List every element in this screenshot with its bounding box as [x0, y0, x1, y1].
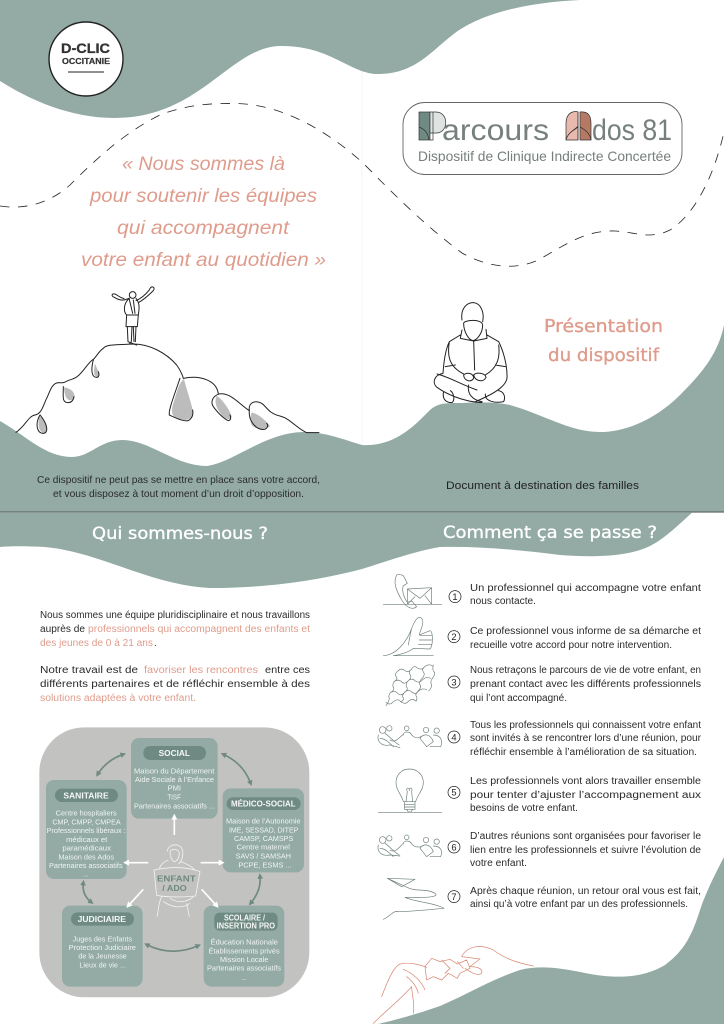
child figure with sign [154, 845, 200, 917]
intro paragraph: . [154, 638, 157, 649]
child figure with sign: / ADO [162, 884, 187, 893]
steps text: Les professionnels vont alors travailler ensemble [470, 776, 701, 787]
consent notice: et vous disposez à tout moment d’un droit d’opposition. [53, 488, 304, 500]
Parcours Ados 81 logo: Dispositif de Clinique Indirecte Concertée [418, 148, 671, 164]
white arrows from child to partners [126, 817, 222, 906]
steps text: Un professionnel qui accompagne votre enfant [470, 583, 701, 594]
bottom wave of cover, right [362, 325, 724, 512]
box: sanitaire: paramédicaux [62, 844, 111, 853]
bottom right green wave [378, 857, 724, 1024]
intro paragraph: favoriser les rencontres [144, 665, 258, 676]
box: judiciaire [62, 906, 143, 987]
heading: présentation du dispositif: du dispositif [548, 345, 660, 366]
steps text [470, 583, 702, 910]
letter P [419, 112, 446, 140]
box: social: Maison du Département [134, 766, 214, 775]
box: judiciaire: Juges des Enfants [73, 934, 132, 943]
steps icons 1 to 4 [378, 575, 461, 748]
box: sanitaire: CMP, CMPP, CMPEA [52, 817, 121, 826]
box: médico-social: SAVS / SAMSAH [236, 851, 291, 860]
box: médico-social: Centre maternel [237, 843, 290, 852]
header band right [362, 513, 692, 569]
steps icons 5 to 7 [378, 769, 460, 919]
heading: qui sommes-nous: Qui sommes-nous ? [92, 524, 268, 544]
box: social: SOCIAL [159, 749, 190, 758]
box: scolaire / insertion pro: SCOLAIRE / [224, 913, 266, 922]
quote: « Nous sommes là [122, 153, 285, 175]
number 4: 4 [451, 732, 457, 742]
number 1: 1 [452, 592, 458, 602]
intro paragraph: professionnels qui accompagnent des enfants et [88, 624, 310, 635]
intro paragraph: des jeunes de 0 à 21 ans [40, 638, 153, 649]
number 2: 2 [451, 632, 457, 642]
quote: qui accompagnent [117, 217, 291, 239]
number 7: 7 [451, 892, 457, 902]
intro paragraph: Notre travail est de [40, 665, 138, 676]
letter A [566, 111, 591, 140]
icon: meeting [378, 835, 442, 857]
box: scolaire / insertion pro: INSERTION PRO [217, 922, 275, 931]
seated teenager [434, 303, 507, 403]
number 6: 6 [451, 842, 457, 852]
number 3: 3 [451, 677, 457, 687]
steps text: lien entre les professionnels et suivre l’évolution de [470, 845, 701, 856]
steps text: qui l’ont accompagné. [470, 693, 567, 704]
box: médico-social [223, 788, 304, 872]
icon: puzzle [386, 665, 435, 706]
Parcours Ados 81 logo: dos 81 [592, 114, 672, 147]
box: judiciaire: Lieux de vie ... [79, 961, 126, 970]
circular arrows between partners [83, 754, 260, 951]
heading: comment ça se passe: Comment ça se passe ? [443, 523, 657, 543]
box: social: Aide Sociale à l’Enfance [135, 775, 214, 784]
box: sanitaire: médicaux et [66, 835, 107, 844]
number 5: 5 [451, 788, 457, 798]
steps text: nous contacte. [470, 596, 536, 607]
box: social: TISF [167, 793, 181, 802]
number 2 [448, 631, 460, 643]
header band left [0, 513, 362, 588]
steps text: Après chaque réunion, un retour oral vous est fait, [470, 886, 701, 897]
intro paragraph [40, 610, 310, 704]
steps text: Tous les professionnels qui connaissent votre enfant [470, 720, 701, 731]
dashed path [0, 103, 724, 266]
steps text: recueille votre accord pour notre intervention. [470, 640, 672, 651]
number 6 [448, 841, 460, 853]
intro paragraph: auprès de [40, 624, 85, 635]
number 3 [448, 676, 460, 688]
bottom wave of cover, left [0, 421, 362, 512]
box: sanitaire [46, 780, 127, 879]
box: social [131, 738, 218, 819]
box: sanitaire: Centre hospitaliers [56, 809, 117, 818]
climber [112, 287, 154, 345]
box: scolaire / insertion pro: Mission Locale [220, 955, 268, 964]
icon: thumbs up [383, 617, 433, 656]
steps text: ainsi qu’à votre enfant par un des professionnels. [470, 899, 688, 910]
box: scolaire / insertion pro: Établissements privés [209, 946, 280, 955]
top green wave [0, 0, 580, 118]
steps text: Nous retraçons le parcours de vie de votre enfant, en [470, 665, 701, 676]
box: médico-social: MÉDICO-SOCIAL [231, 800, 296, 809]
heading: présentation du dispositif [544, 316, 663, 366]
box: judiciaire: JUDICIAIRE [78, 915, 127, 924]
intro paragraph: solutions adaptées à votre enfant. [40, 693, 196, 704]
box: sanitaire: Maison des Ados [58, 852, 114, 861]
Parcours Ados 81 logo [403, 102, 682, 174]
box: social: Partenaires associatifs ... [134, 802, 215, 811]
number 5 [448, 786, 460, 798]
D-CLIC Occitanie logo: OCCITANIE [62, 57, 110, 66]
steps text: réfléchir ensemble à l’amélioration de sa situation. [470, 747, 697, 758]
consent notice: Ce dispositif ne peut pas se mettre en place sans votre accord, [37, 474, 320, 486]
heading: présentation du dispositif: Présentation [544, 316, 663, 337]
Parcours Ados 81 logo: arcours [442, 114, 549, 147]
intro paragraph: entre ces [265, 665, 310, 676]
quote: votre enfant au quotidien » [81, 249, 326, 271]
number 4 [448, 731, 460, 743]
number 1 [449, 591, 461, 603]
box: judiciaire: de la Jeunesse [78, 952, 127, 961]
intro paragraph: Nous sommes une équipe pluridisciplinaire et nous travaillons [40, 610, 310, 621]
quote [81, 153, 326, 271]
hands with puzzle pieces [373, 947, 533, 1023]
mountain with climber [16, 287, 319, 433]
box: médico-social: PCPE, ESMS ... [238, 860, 292, 869]
steps text: pour tenter d’ajuster l’accompagnement aux [470, 790, 701, 801]
box: social: PMI [168, 784, 181, 793]
D-CLIC Occitanie logo: D-CLIC [61, 41, 110, 56]
steps text: sont invités à se rencontrer lors d’une réunion, pour [470, 733, 702, 744]
quote: pour soutenir les équipes [89, 185, 317, 207]
box: judiciaire: Protection Judiciaire [69, 943, 136, 952]
audience note: Document à destination des familles [446, 480, 640, 492]
box: sanitaire: Professionnels libéraux : [47, 826, 126, 835]
box: scolaire / insertion pro: Partenaires associatifs [207, 964, 281, 973]
box: médico-social: CAMSP, CAMSPS [234, 834, 293, 843]
steps text: D’autres réunions sont organisées pour favoriser le [470, 831, 701, 842]
box: sanitaire: Partenaires associatifs [49, 861, 123, 870]
icon: phone and envelope [383, 575, 442, 608]
steps text: besoins de votre enfant. [470, 803, 578, 814]
box: scolaire / insertion pro [204, 906, 284, 987]
steps text: prenant contact avec les différents professionnels [470, 679, 701, 690]
box: sanitaire: ... [83, 870, 88, 879]
network diagram [39, 727, 309, 997]
icon: light bulb [378, 769, 442, 812]
D-CLIC Occitanie logo [49, 22, 123, 96]
consent notice [37, 474, 320, 500]
icon: meeting [378, 726, 442, 748]
steps text: Ce professionnel vous informe de sa démarche et [470, 626, 701, 637]
box: scolaire / insertion pro: ... [242, 973, 247, 982]
icon: paper plane [383, 878, 444, 919]
box: médico-social: Maison de l’Autonomie [226, 816, 301, 825]
steps text: votre enfant. [470, 858, 527, 869]
box: scolaire / insertion pro: Éducation Nationale [211, 938, 278, 947]
number 7 [448, 891, 460, 903]
intro paragraph: différents partenaires et de réfléchir ensemble à des [40, 679, 310, 690]
box: sanitaire: SANITAIRE [63, 791, 109, 800]
box: médico-social: IME, SESSAD, DITEP [229, 825, 298, 834]
child figure with sign: ENFANT [157, 874, 196, 883]
